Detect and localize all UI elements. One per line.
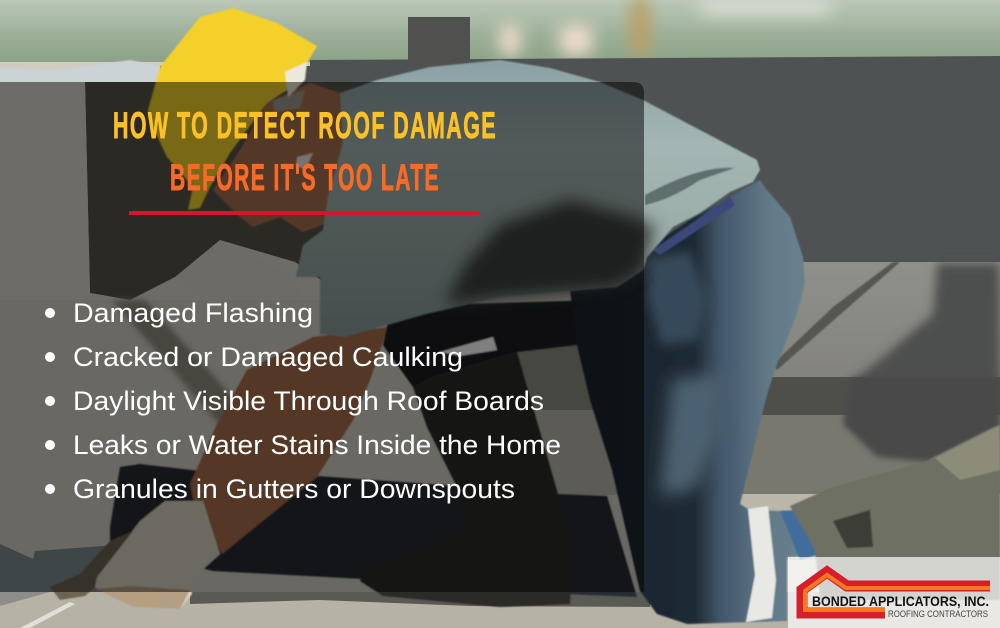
worker: shirt shadow [445, 200, 655, 305]
worker: sock [440, 337, 497, 356]
bullet list [45, 298, 561, 504]
title underline [129, 211, 479, 215]
logo backing [788, 557, 1000, 628]
title [113, 105, 497, 198]
bullet 1: Damaged Flashing [73, 298, 313, 328]
bullet 5: Granules in Gutters or Downspouts [73, 474, 515, 504]
worker: shin pad [790, 425, 1000, 600]
worker: lower trouser cuff [780, 510, 820, 560]
logo panel [788, 557, 1000, 628]
worker: dark thigh [383, 300, 600, 387]
worker: hard hat [148, 8, 317, 210]
worker: shirt [296, 60, 760, 337]
title line 1: HOW TO DETECT ROOF DAMAGE [113, 105, 497, 146]
worker: head [213, 83, 343, 232]
worker: trouser leg [570, 180, 820, 624]
worker: reflective strip [746, 506, 776, 622]
bullet 3: Daylight Visible Through Roof Boards [73, 386, 544, 416]
worker: knee folds [660, 372, 725, 495]
roofing material roll [110, 464, 637, 597]
dark translucent panel [0, 82, 644, 592]
bullet 4: Leaks or Water Stains Inside the Home [73, 430, 561, 460]
worker: glove [95, 501, 220, 609]
worker: waistband [653, 197, 735, 255]
worker: forearm [190, 327, 388, 554]
bullet 2: Cracked or Damaged Caulking [73, 342, 463, 372]
worker: pocket shading [648, 252, 708, 345]
title line 2: BEFORE IT'S TOO LATE [170, 157, 440, 198]
logo icon: house roofline [802, 572, 990, 613]
worker: shirt crease [645, 168, 735, 205]
worker: boot [360, 352, 572, 607]
